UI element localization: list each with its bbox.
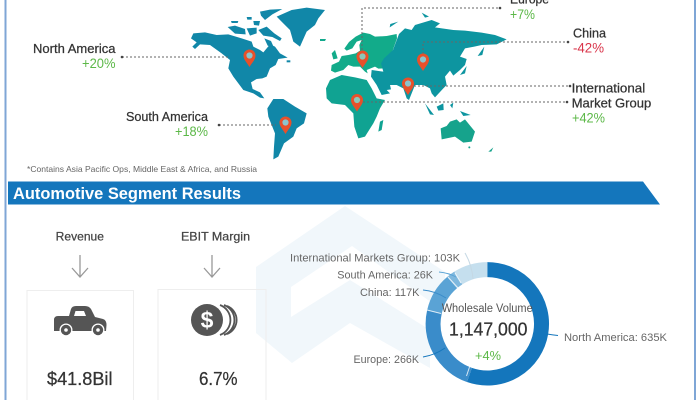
section banner: Automotive Segment Results <box>13 184 241 203</box>
label: International Market Group: International <box>572 81 645 96</box>
icon: pickup truck <box>54 306 106 336</box>
center text: total: 1,147,000 <box>449 320 528 340</box>
label: China: China <box>573 26 607 40</box>
Asia <box>371 13 507 116</box>
segment: International Markets Group <box>458 270 487 278</box>
segment: North America <box>469 270 542 378</box>
label: International Market Group: Market Group <box>572 96 651 110</box>
South America <box>267 99 307 159</box>
label: China: -42% <box>573 40 604 56</box>
label: China <box>573 26 607 56</box>
panel: EBIT margin <box>158 230 266 400</box>
heading: revenue: Revenue <box>56 230 104 244</box>
icon: dollar coins <box>191 304 237 336</box>
segment separators <box>427 273 472 376</box>
label: North America: North America <box>33 41 116 56</box>
pin: North America <box>244 50 256 67</box>
pin: China <box>417 54 429 71</box>
value: EBIT margin: 6.7% <box>199 369 238 389</box>
panel: revenue <box>27 230 134 400</box>
center text: change: +4% <box>475 348 501 363</box>
label: North America: +20% <box>82 55 116 71</box>
label: Europe <box>510 0 549 22</box>
label: International Market Group: +42% <box>572 110 605 126</box>
pin: India <box>402 78 414 95</box>
card: revenue <box>27 290 134 400</box>
watermark logo <box>256 206 445 368</box>
footnote: *Contains Asia Pacific Ops, Middle East & Africa, and Russia <box>27 164 257 174</box>
arrow: EBIT margin <box>204 255 220 277</box>
North America and Greenland <box>191 8 325 98</box>
pin: Europe <box>356 50 368 68</box>
section banner <box>8 182 660 204</box>
segment: China <box>434 283 452 312</box>
label: International Market Group <box>572 81 651 126</box>
segment: South America <box>452 278 458 283</box>
map pins <box>244 50 429 134</box>
heading: EBIT margin: EBIT Margin <box>181 230 250 244</box>
label: China: China: 117K <box>360 287 420 299</box>
label: North America <box>33 41 116 71</box>
label: North America: North America: 635K <box>564 332 668 344</box>
connector end dots <box>121 7 571 126</box>
label: International Markets Group: International Markets Group: 103K <box>290 253 461 265</box>
Australia and New Zealand <box>441 119 493 152</box>
donut chart: wholesale volume <box>290 253 668 378</box>
label: South America: South America <box>126 109 209 124</box>
Iceland <box>320 39 326 41</box>
label: South America: South America: 26K <box>337 270 434 282</box>
value: revenue: $41.8Bil <box>47 369 112 389</box>
pin: South America <box>280 116 292 134</box>
icon: dollar coins: $ <box>201 307 214 333</box>
label: Europe: +7% <box>510 6 535 22</box>
leader lines <box>423 253 558 357</box>
dotted connector lines <box>122 8 570 125</box>
world map <box>191 8 507 159</box>
card: EBIT margin <box>158 290 266 400</box>
label: Europe: Europe: 266K <box>354 354 420 366</box>
Africa <box>326 75 385 138</box>
center text: title: Wholesale Volume <box>442 303 533 315</box>
segment: Europe <box>433 312 469 375</box>
pin: Africa <box>351 94 363 112</box>
label: South America <box>126 109 209 139</box>
label: South America: +18% <box>175 123 208 139</box>
Europe <box>331 33 397 73</box>
arrow: revenue <box>72 255 88 277</box>
